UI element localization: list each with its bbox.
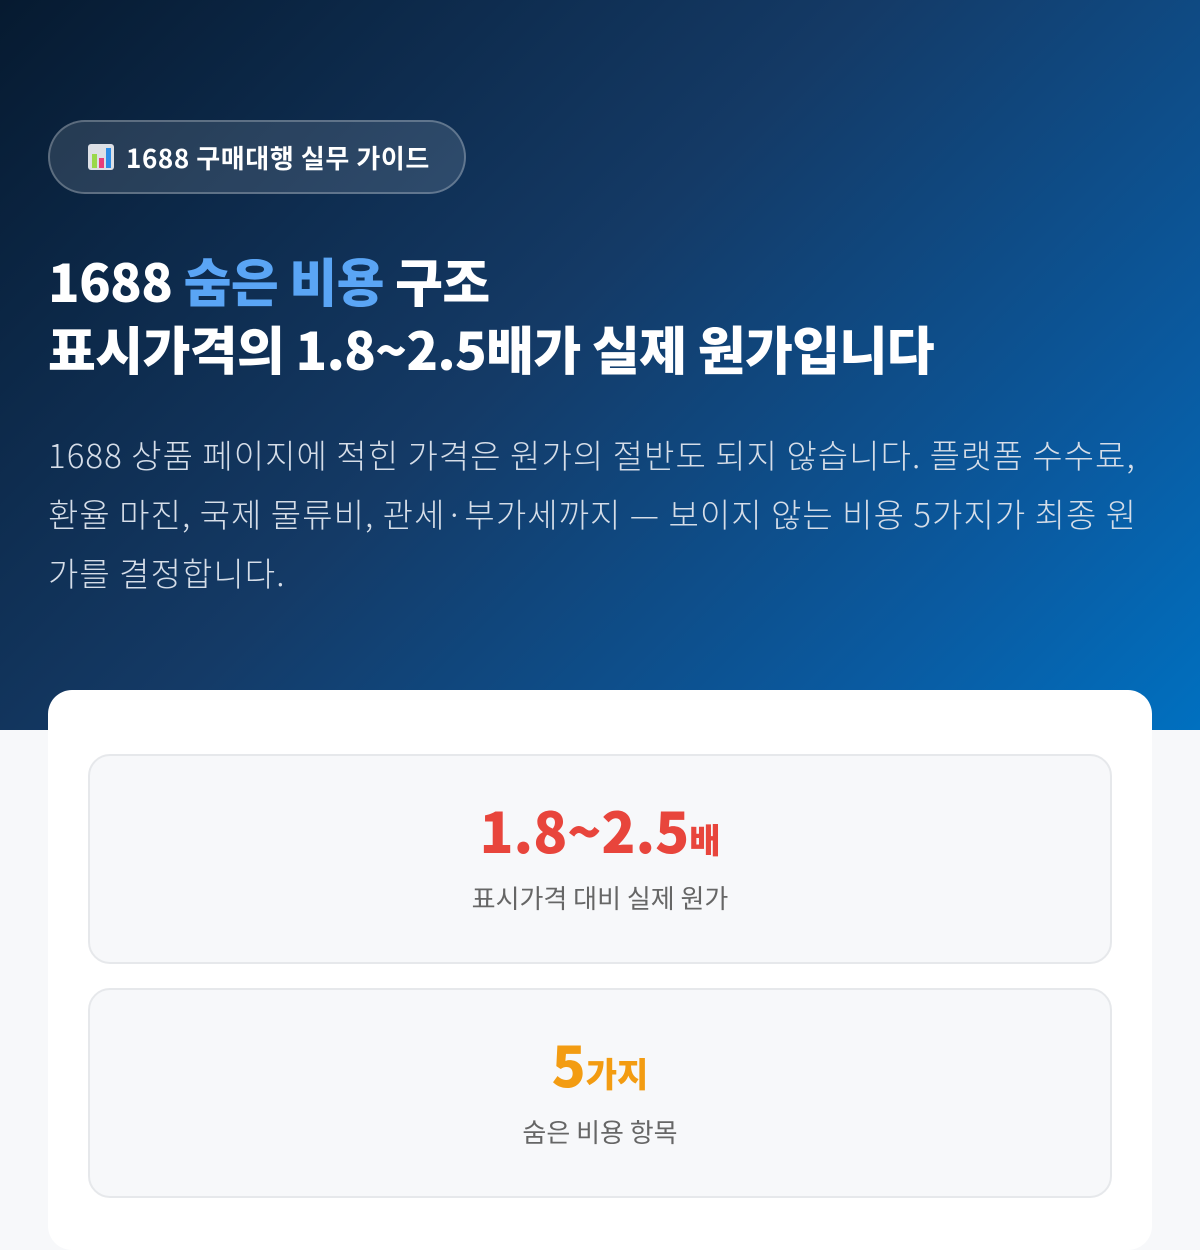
title: 표시가격의 1.8~2.5배가 실제 원가입니다 <box>48 310 934 385</box>
stat: multiplier: 1.8~2.5배 <box>479 789 721 870</box>
badge: 1688 구매대행 실무 가이드 <box>126 138 430 176</box>
icon: bar chart <box>88 144 114 170</box>
card panel <box>48 690 1152 1250</box>
stat: 5 items: 5가지 <box>552 1023 648 1104</box>
stat: multiplier <box>88 754 1112 964</box>
stat: 5 items: 숨은 비용 항목 <box>522 1113 678 1150</box>
title <box>48 242 934 385</box>
description: 환율 마진, 국제 물류비, 관세·부가세까지 — 보이지 않는 비용 5가지가 최종 원 <box>48 489 1137 537</box>
stat: 5 items <box>88 988 1112 1198</box>
description: 가를 결정합니다. <box>48 548 286 596</box>
description: 1688 상품 페이지에 적힌 가격은 원가의 절반도 되지 않습니다. 플랫폼 수수료, <box>48 430 1136 478</box>
title: 1688 숨은 비용 구조 <box>48 242 490 317</box>
description <box>48 430 1137 596</box>
stat: multiplier: 표시가격 대비 실제 원가 <box>472 879 728 916</box>
hero background <box>0 0 1200 730</box>
badge <box>48 120 466 194</box>
